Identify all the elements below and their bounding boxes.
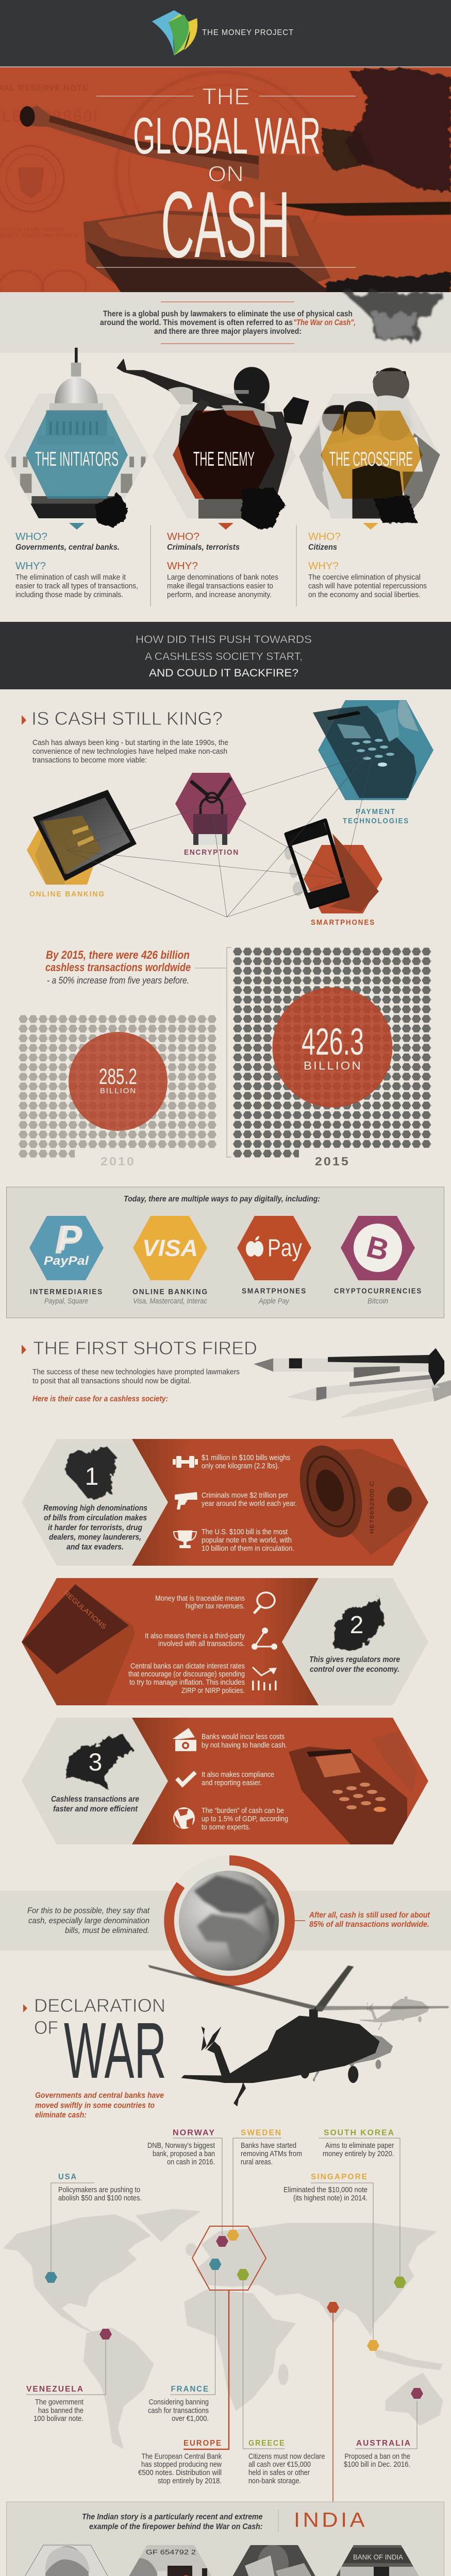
callout: greece (248, 2439, 325, 2485)
icon: third party network (252, 1628, 277, 1650)
cash is king text: transactions to become more viable: (32, 756, 147, 765)
declaration intro: moved swiftly in some countries to (35, 2101, 155, 2110)
icon: paypal: PayPal (44, 1254, 89, 1268)
world map (3, 2209, 443, 2449)
callout: europe: €500 notes. Distribution will (138, 2468, 222, 2477)
callout: south korea: SOUTH KOREA (324, 2129, 395, 2137)
callout: norway (147, 2129, 215, 2166)
technology: payment technologies (313, 700, 433, 825)
case 3 facts: The “burden” of cash can be (202, 1806, 284, 1815)
callout: sweden: SWEDEN (241, 2129, 282, 2137)
first shots text: to posit that all transactions should now be digital. (32, 1377, 191, 1385)
case 2 facts: to try to manage inflation. This includes (129, 1678, 245, 1687)
logo: the money project (152, 10, 294, 56)
callout: venezuela: has banned the (38, 2406, 83, 2415)
callout: norway: NORWAY (173, 2129, 215, 2137)
hand holding phone (285, 834, 379, 912)
payment labels: Bitcoin (368, 1297, 388, 1306)
callout: norway: bank, proposed a ban (153, 2149, 215, 2158)
intro text: There is a global push by lawmakers to eliminate the use of physical cash (103, 310, 353, 318)
case 2 facts: It also means there is a third-party (145, 1632, 245, 1640)
missiles (254, 1348, 451, 1418)
stat callout: 426 billion: By 2015, there were 426 billion (46, 948, 190, 961)
card terminal (313, 701, 419, 798)
callout: australia: AUSTRALIA (356, 2439, 411, 2448)
case 3 facts: Banks would incur less costs (202, 1732, 285, 1741)
technology: payment technologies: TECHNOLOGIES (343, 817, 409, 825)
india intro: example of the firepower behind the War on Cash: (89, 2522, 263, 2531)
column: enemy who and why: Large denominations of bank notes (167, 573, 278, 582)
argument: faster and more efficient (53, 1805, 138, 1814)
europe and india highlight lines (183, 2226, 333, 2502)
callout: sweden: removing ATMs from (241, 2149, 302, 2158)
callout: singapore (283, 2173, 368, 2202)
callout: france: over €1,000. (172, 2414, 209, 2423)
left statement: cash, especially large denomination (28, 1917, 149, 1925)
case 1 facts: only one kilogram (2.2 lbs). (202, 1462, 279, 1470)
cash is king text (32, 738, 228, 765)
helicopters (148, 1965, 448, 2107)
header bar (0, 0, 451, 67)
intro text (100, 310, 356, 336)
ink number 3: 3 (89, 1749, 102, 1776)
callout: greece: GREECE (248, 2439, 286, 2448)
argument (51, 1795, 139, 1814)
callout: europe (138, 2439, 222, 2485)
ink splash over tank (325, 69, 451, 299)
case 3 facts (202, 1732, 288, 1832)
heading: declaration of war (23, 1995, 166, 2095)
argument: Removing high denominations (43, 1504, 147, 1513)
ink number 2: 2 (350, 1612, 363, 1639)
first shots text (32, 1367, 240, 1403)
case 3 facts: by not having to handle cash. (202, 1741, 287, 1750)
payment labels: INTERMEDIARIES (30, 1287, 103, 1296)
argument (43, 1504, 147, 1552)
heading: declaration of war: DECLARATION (34, 1995, 165, 2016)
banknote watermark: DEBTS, PUBLIC AND PRIVATE (0, 233, 79, 238)
column: crossfire who and why: cash will have potential repercussions (308, 582, 427, 590)
icon: paypal: P (55, 1217, 82, 1262)
payment labels: Paypal, Square (44, 1297, 88, 1306)
logo: the money project: THE MONEY PROJECT (202, 28, 294, 37)
payment labels (30, 1287, 422, 1306)
column: crossfire who and why: The coercive elimination of physical (308, 573, 421, 582)
name: THE ENEMY (193, 448, 255, 470)
case 3 facts: to some experts. (202, 1823, 250, 1832)
callout: venezuela (26, 2385, 84, 2423)
case 2 facts: Money that is traceable means (155, 1594, 245, 1603)
callout: sweden (241, 2129, 302, 2166)
technology: online banking: ONLINE BANKING (29, 890, 105, 899)
bubble 426.3 billion: BILLION (304, 1059, 362, 1072)
case 2 facts: involved with all transactions. (158, 1639, 245, 1648)
first shots text: The success of these new technologies have prompted lawmakers (32, 1367, 240, 1377)
band: cash still used (0, 1891, 451, 1951)
callout: venezuela: 100 bolivar note. (34, 2414, 83, 2423)
callout: greece: Citizens must now declare (248, 2452, 325, 2461)
photo: bank of india queue (330, 2545, 425, 2576)
column: initiators who and why: WHO? (15, 531, 47, 543)
banknote watermark (0, 72, 327, 301)
right statement: After all, cash is still used for about (309, 1911, 430, 1920)
payment labels: Visa, Mastercard, Interac (133, 1297, 207, 1306)
case 1 facts: The U.S. $100 bill is the most (202, 1528, 288, 1536)
intro text: "The War on Cash", (293, 318, 356, 327)
payment labels: ONLINE BANKING (132, 1287, 208, 1296)
ink splash (95, 493, 127, 527)
panel: india (6, 2502, 444, 2576)
bubble 285.2 billion (69, 1032, 168, 1131)
right statement (309, 1911, 430, 1929)
first shots text: Here is their case for a cashless society: (32, 1395, 168, 1403)
bubble 285.2 billion: 285.2 (99, 1064, 137, 1089)
case 3: faster and more efficient (22, 1718, 428, 1844)
photo: rupee note (120, 2545, 218, 2576)
india intro: The Indian story is a particularly recent and extreme (82, 2513, 263, 2521)
argument: Cashless transactions are (51, 1795, 139, 1804)
callout: norway: on cash in 2016. (167, 2158, 215, 2166)
callout: france (148, 2385, 209, 2423)
callout: france: FRANCE (171, 2385, 209, 2394)
callout: singapore: (its highest note) in 2014. (293, 2194, 368, 2202)
column: crossfire who and why: WHY? (308, 561, 339, 572)
globe photo (179, 1871, 279, 1971)
dot chart: 2010 (19, 1015, 217, 1168)
tablet (33, 790, 137, 881)
india heading: INDIA (294, 2509, 368, 2532)
photo: bank of india queue: BANK OF INDIA (353, 2553, 404, 2561)
column: initiators who and why: The elimination of cash will make it (15, 573, 126, 582)
capitol building (4, 348, 148, 521)
bubble 285.2 billion: BILLION (100, 1087, 137, 1095)
declaration intro: eliminate cash: (35, 2111, 87, 2120)
ink number 3 (64, 1734, 133, 1789)
column: initiators who and why: including those made by criminals. (15, 590, 123, 599)
callout: europe: EUROPE (183, 2439, 222, 2448)
ink drip (343, 292, 443, 340)
stat callout: 426 billion: - a 50% increase from five years before. (47, 975, 189, 986)
cash is king text: convenience of new technologies have helped make non-cash (32, 747, 227, 756)
callout: greece: all cash over €15,000 (248, 2460, 311, 2469)
icon: bitcoin: B (363, 1230, 392, 1267)
callout: australia: $100 bill in Dec. 2016. (344, 2460, 410, 2469)
case 1 facts: 10 billion of them in circulation. (202, 1544, 294, 1553)
title (96, 83, 356, 277)
case 1 facts: $1 million in $100 bills weighs (202, 1453, 290, 1462)
case 2 facts: that encourage (or discourage) spending (128, 1670, 245, 1679)
technology: encryption (175, 773, 246, 857)
column: enemy who and why: Criminals, terrorists (167, 543, 240, 552)
icon: visa: VISA (142, 1235, 198, 1261)
left statement: bills, must be eliminated. (65, 1926, 149, 1935)
case 1 facts (202, 1453, 297, 1553)
panel: ways to pay digitally (6, 1187, 444, 1318)
photo: rupee note: GF 654792 2 (146, 2548, 196, 2556)
icon: paypal (29, 1216, 104, 1280)
icon: paypal: P (58, 1218, 82, 1258)
question banner: HOW DID THIS PUSH TOWARDS (136, 634, 312, 646)
column: initiators who and why (15, 531, 138, 599)
callout: venezuela: VENEZUELA (26, 2385, 84, 2394)
stat callout: 426 billion: cashless transactions worldwide (45, 961, 191, 974)
cash is king text: Cash has always been king - but starting in the late 1990s, the (32, 738, 228, 747)
case 1 facts: Criminals move $2 trillion per (202, 1491, 288, 1500)
callout: south korea: Aims to eliminate paper (325, 2141, 394, 2150)
phone (286, 820, 348, 907)
argument: dealers, money launderers, (49, 1533, 141, 1541)
dot chart: 2010: 2010 (101, 1155, 136, 1168)
icon: trophy (174, 1531, 196, 1548)
banknote watermark: NOTE IS LEGAL TENDER (0, 227, 65, 232)
icon: apple pay (237, 1216, 311, 1280)
payment labels: CRYPTOCURRENCIES (334, 1287, 422, 1295)
callout: europe: has stopped producing new (141, 2460, 222, 2469)
callout: france: Considering banning (148, 2398, 209, 2406)
player: the enemy (116, 359, 309, 529)
left statement (27, 1906, 150, 1935)
column: enemy who and why (167, 531, 278, 599)
ink number 1: 1 (85, 1463, 98, 1490)
icon: visa (133, 1216, 207, 1280)
title: THE (202, 83, 250, 110)
intro band (0, 292, 451, 353)
map callout lines (26, 2138, 417, 2449)
photo: man holding rupees (227, 2545, 321, 2576)
column: crossfire who and why: WHO? (308, 531, 341, 543)
player: the crossfire (299, 367, 440, 523)
icon: rate chart (252, 1667, 277, 1690)
bubble 426.3 billion: 426.3 (302, 1021, 364, 1063)
payment labels: Apple Pay (258, 1297, 290, 1306)
question banner: AND COULD IT BACKFIRE? (149, 667, 298, 679)
player: the initiators (4, 348, 149, 527)
ink number 2 (334, 1597, 384, 1651)
case 3 facts: and reporting easier. (202, 1778, 262, 1787)
column: crossfire who and why: Citizens (308, 543, 337, 552)
heading: declaration of war: OF (34, 2017, 58, 2038)
callout: australia (344, 2439, 411, 2469)
callout: sweden: Banks have started (241, 2141, 296, 2150)
callout: usa: abolish $50 and $100 notes. (58, 2194, 142, 2202)
callout: europe: The European Central Bank (141, 2452, 222, 2461)
column: initiators who and why: easier to track all types of transactions, (15, 582, 138, 590)
title: CASH (161, 172, 290, 277)
case 2: regulators control (22, 1578, 428, 1705)
case 3 facts: It also makes compliance (202, 1770, 274, 1779)
padlock and chain (191, 778, 231, 845)
pointer triangles (69, 523, 378, 530)
technology: online banking (27, 790, 137, 899)
dot chart: 2015 (233, 948, 432, 1168)
name: THE INITIATORS (35, 448, 119, 470)
declaration intro (35, 2091, 164, 2120)
case 1 facts: year around the world each year. (202, 1499, 297, 1508)
icon: magnifier (255, 1592, 275, 1613)
heading: the first shots fired: THE FIRST SHOTS FIRED (33, 1337, 257, 1359)
tank (20, 106, 451, 292)
callout: france: cash for transactions (148, 2406, 209, 2415)
donut chart: 85 percent of transactions (164, 1856, 295, 1986)
argument: it harder for terrorists, drug (48, 1523, 142, 1532)
case 2 facts: ZIRP or NIRP policies. (181, 1686, 245, 1695)
case 1 facts: popular note in the world, with (202, 1536, 292, 1545)
icon: apple pay: Pay (268, 1234, 302, 1261)
network connecting lines (66, 754, 372, 917)
regulations book: REGULATIONS (62, 1589, 108, 1631)
bubble 426.3 billion (272, 987, 393, 1108)
callout: singapore: SINGAPORE (311, 2173, 368, 2181)
callout: norway: DNB, Norway's biggest (147, 2141, 215, 2150)
column: crossfire who and why (308, 531, 427, 599)
ink splash (242, 487, 285, 529)
callout: sweden: rural areas. (241, 2158, 273, 2166)
case 3 facts: up to 1.5% of GDP, according (202, 1815, 288, 1823)
map markers (45, 2230, 423, 2399)
money roll: HE78692900 C (369, 1481, 375, 1534)
callout: usa (58, 2173, 142, 2202)
regulations book (22, 1584, 135, 1705)
case 2 facts: Central banks can dictate interest rates (130, 1662, 245, 1670)
column: enemy who and why: perform, and increase anonymity. (167, 590, 272, 599)
card terminal (289, 1731, 417, 1844)
column: enemy who and why: WHO? (167, 531, 199, 543)
stat callout: 426 billion (45, 948, 191, 986)
argument: control over the economy. (310, 1665, 399, 1674)
icon: cash (173, 1728, 196, 1751)
callout: australia: Proposed a ban on the (344, 2452, 410, 2461)
callout: venezuela: The government (35, 2398, 84, 2406)
argument: This gives regulators more (309, 1655, 400, 1664)
heading: is cash still king: IS CASH STILL KING? (31, 708, 223, 729)
icon: bitcoin (341, 1216, 415, 1280)
india intro (82, 2513, 263, 2531)
question banner (0, 622, 451, 689)
question banner: A CASHLESS SOCIETY START, (145, 651, 303, 663)
intro text: and there are three major players involved: (154, 327, 302, 336)
icon: check mark (177, 1772, 195, 1785)
gunman (116, 359, 309, 519)
callout: usa: Policymakers are pushing to (58, 2185, 140, 2194)
ink splash (374, 495, 417, 523)
payment labels: SMARTPHONES (242, 1287, 307, 1295)
icon: pistol (175, 1492, 197, 1510)
callout: singapore: Eliminated the $10,000 note (283, 2185, 368, 2194)
callout: usa: USA (58, 2173, 77, 2181)
callout: europe: stop entirely by 2018. (158, 2477, 222, 2485)
case 2 facts: higher tax revenues. (186, 1602, 245, 1611)
intro text: around the world. This movement is often referred to as (100, 318, 293, 327)
banknote watermark: L60328860I (2, 108, 99, 125)
case 1: removing high denominations (22, 1437, 428, 1566)
group of citizens (299, 367, 440, 519)
case 2 facts (128, 1594, 245, 1695)
column: initiators who and why: WHY? (15, 561, 46, 572)
callout: south korea (323, 2129, 395, 2158)
left statement: For this to be possible, they say that (27, 1906, 150, 1916)
heading: declaration of war: WAR (64, 2006, 166, 2095)
callout: greece: non-bank storage. (248, 2477, 301, 2485)
hero panel (0, 67, 451, 301)
column: enemy who and why: WHY? (167, 561, 198, 572)
technology: payment technologies: PAYMENT (356, 807, 396, 816)
column: crossfire who and why: on the economy and social liberties. (308, 590, 421, 599)
column: enemy who and why: make illegal transactions easier to (167, 582, 273, 590)
argument (309, 1655, 400, 1674)
declaration intro: Governments and central banks have (35, 2091, 164, 2100)
panel: ways to pay digitally: Today, there are multiple ways to pay digitally, including: (124, 1195, 320, 1204)
column: initiators who and why: Governments, central banks. (15, 543, 120, 552)
icon: dumbbell (173, 1456, 198, 1468)
title: ON (208, 162, 244, 187)
ink number 1 (66, 1445, 118, 1498)
technology: smartphones (285, 820, 382, 927)
icon: globe (173, 1807, 195, 1829)
right statement: 85% of all transactions worldwide. (309, 1920, 429, 1929)
callout: greece: held in safes or other (248, 2468, 310, 2477)
money roll (300, 1446, 428, 1555)
dot chart: 2015: 2015 (315, 1155, 350, 1168)
technology: encryption: ENCRYPTION (184, 848, 239, 857)
argument: of bills from circulation makes (44, 1514, 147, 1522)
photo: narendra modi (19, 2545, 113, 2576)
callout: south korea: money entirely by 2020. (323, 2149, 394, 2158)
argument: and tax evaders. (66, 1543, 124, 1552)
technology: smartphones: SMARTPHONES (311, 918, 375, 927)
